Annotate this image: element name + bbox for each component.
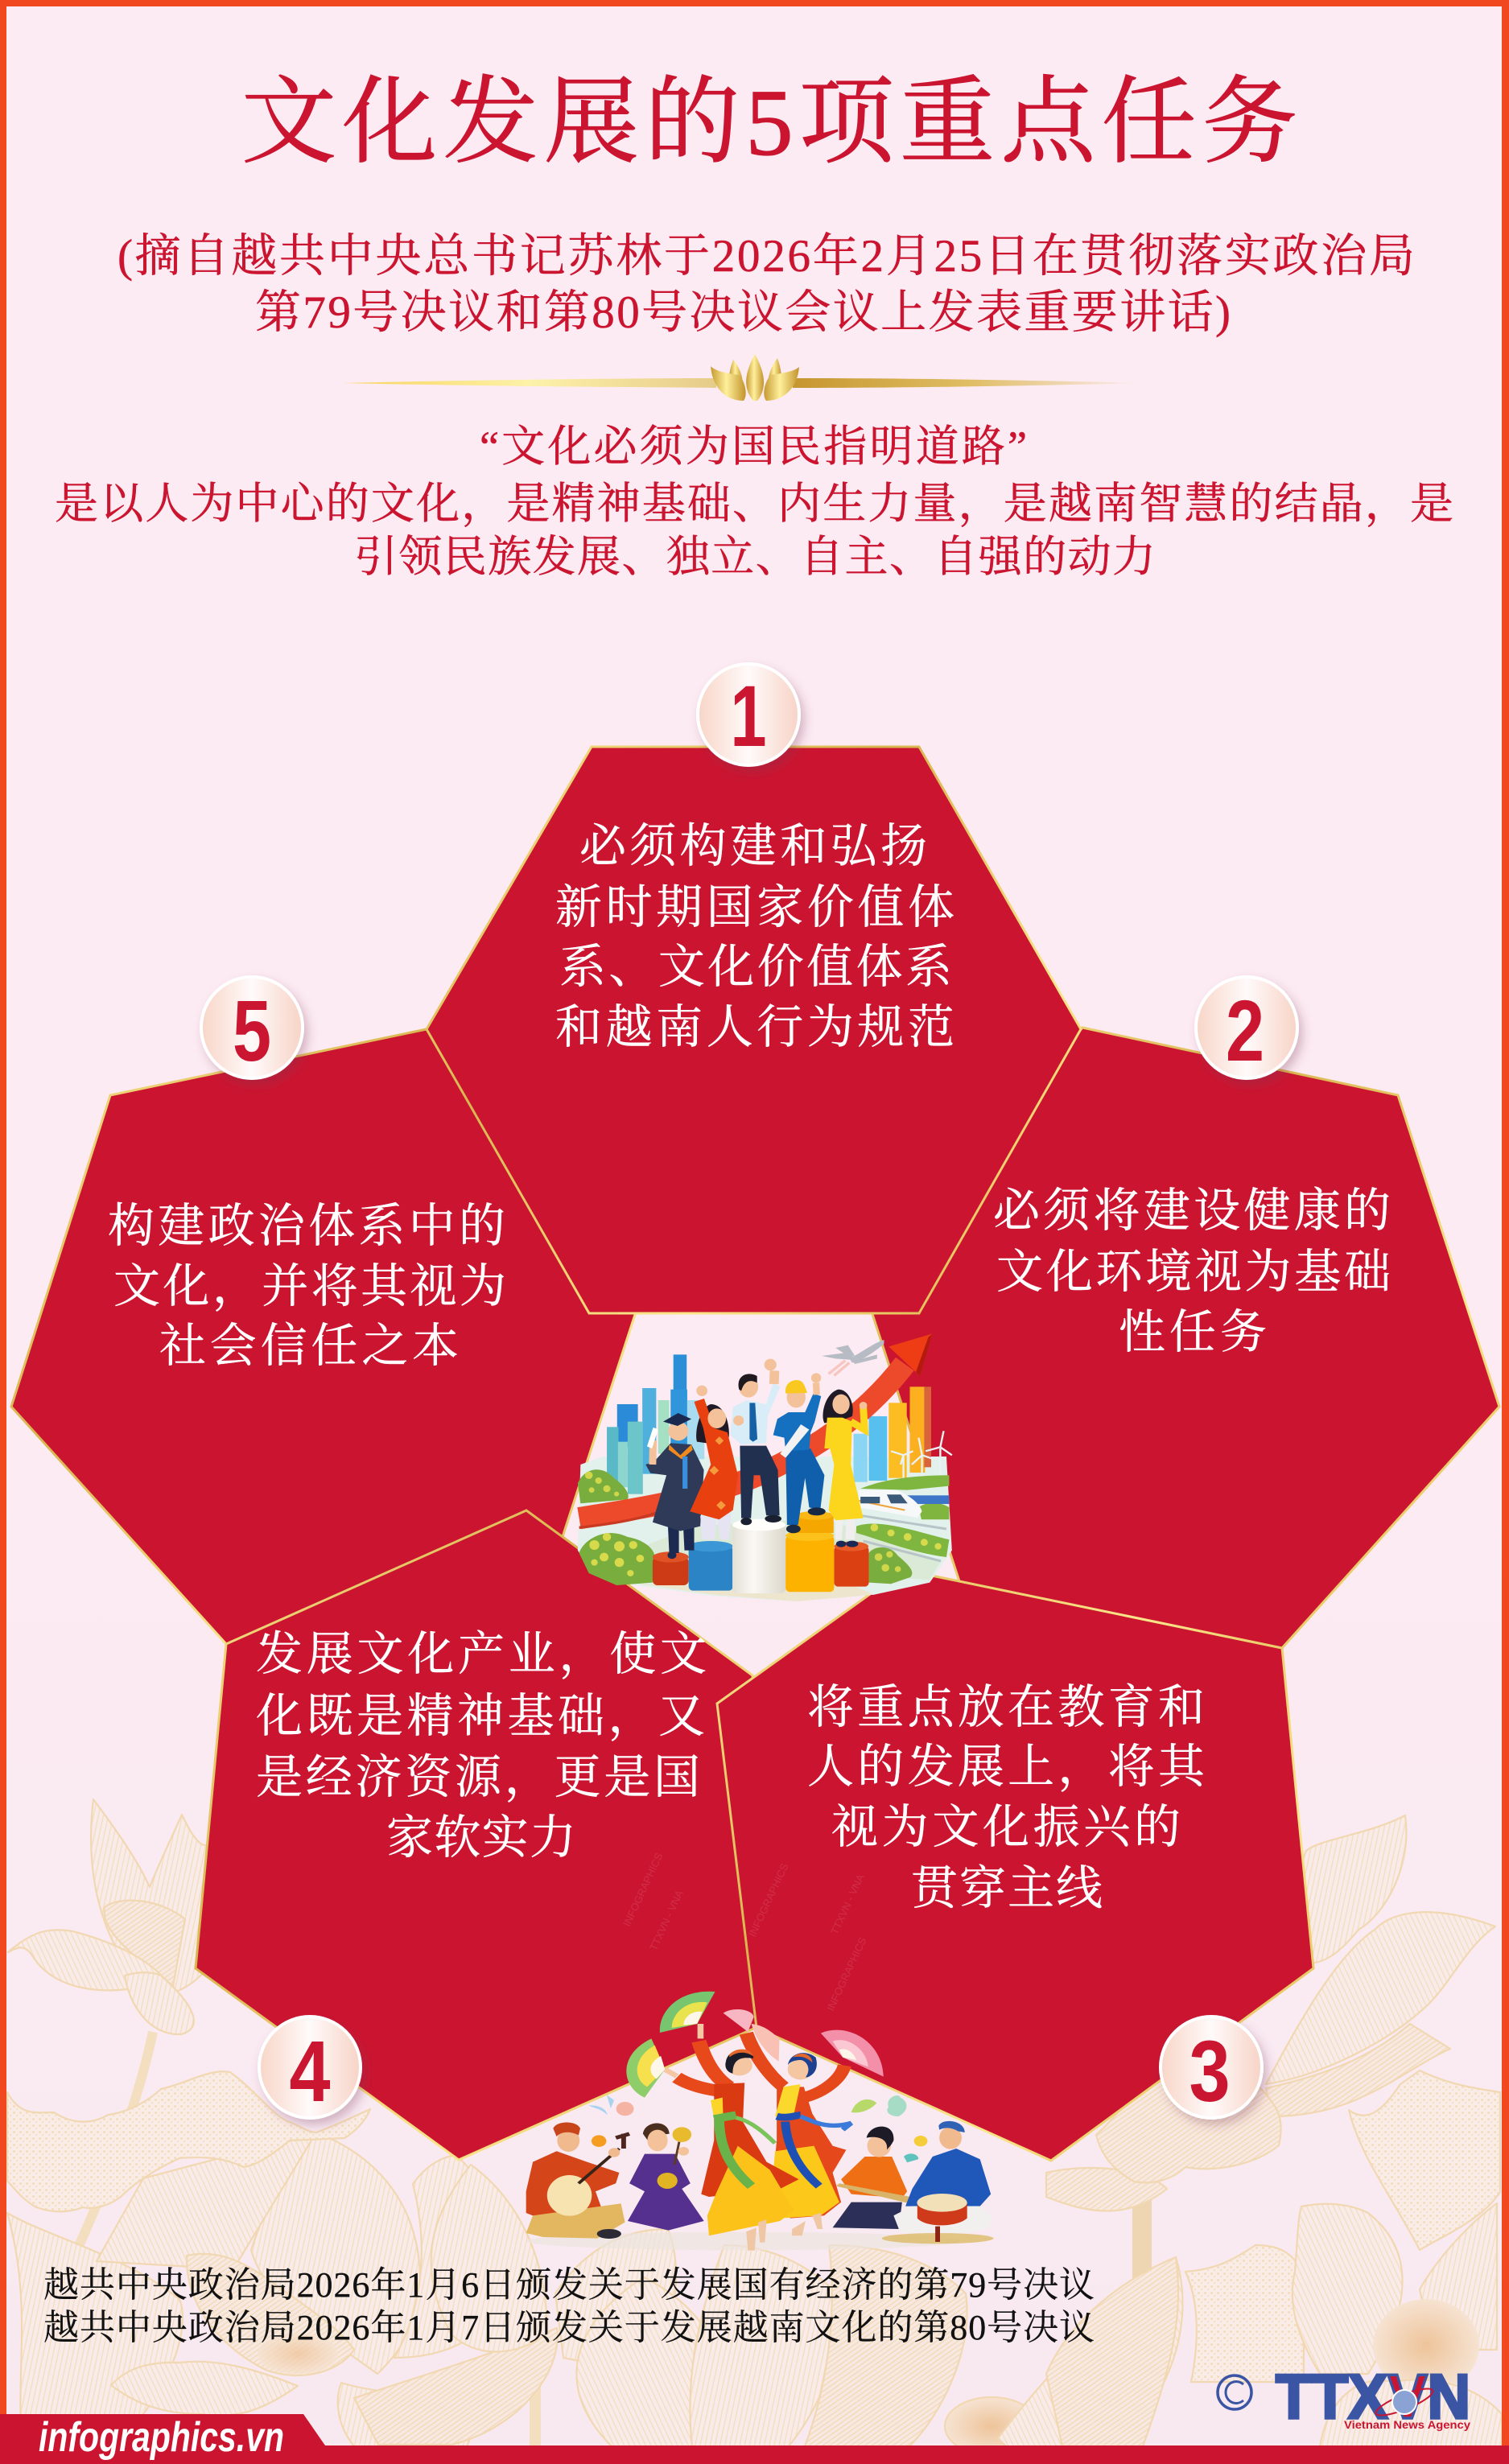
panel 3 text: 人的发展上，将其 <box>807 1741 1207 1793</box>
panel 5 text: 构建政治体系中的 <box>108 1200 505 1252</box>
number badge 4: 4 <box>289 2023 331 2120</box>
musician: woman in purple <box>628 2124 704 2231</box>
number badge 1 <box>698 664 799 765</box>
airplane <box>822 1340 884 1375</box>
dancer left <box>665 2024 798 2251</box>
globe with orbit <box>1373 2384 1436 2421</box>
skyline buildings <box>607 1354 887 1494</box>
faint watermarks: INFOGRAPHICS <box>621 1851 666 1928</box>
panel 4 text: 化既是精神基础，又 <box>256 1690 705 1742</box>
podium cylinders <box>653 1511 869 1593</box>
number badge 4 <box>259 2017 361 2120</box>
panel 3 text: 视为文化振兴的 <box>831 1801 1181 1853</box>
faint watermarks <box>621 1851 869 2013</box>
number badge 2 <box>1196 977 1297 1079</box>
quote and statement <box>55 422 1453 581</box>
agency caption: Vietnam News Agency <box>1344 2418 1470 2431</box>
agency wordmark: TTXVN <box>1276 2361 1470 2432</box>
dancer right <box>746 2033 851 2235</box>
musician: drummer in blue <box>882 2121 994 2244</box>
panel 2 text: 性任务 <box>1119 1306 1267 1358</box>
site name: infographics.vn <box>39 2414 284 2461</box>
fan: top pink <box>724 2009 780 2062</box>
panel 5 text: 社会信任之本 <box>159 1320 459 1372</box>
figure: graduate <box>645 1413 704 1559</box>
resolution references <box>43 2265 1095 2347</box>
fan: top green-yellow <box>660 1992 715 2033</box>
quote and statement: “文化必须为国民指明道路” <box>480 422 1027 471</box>
panel 3 text: 贯穿主线 <box>911 1862 1103 1914</box>
panel 2 text: 必须将建设健康的 <box>993 1185 1391 1237</box>
number badge 5 <box>201 977 303 1079</box>
subtitle: (摘自越共中央总书记苏林于2026年2月25日在贯彻落实政治局 <box>118 231 1415 282</box>
figure: worker in yellow hard hat <box>773 1373 826 1533</box>
divider with golden lotus <box>343 354 1143 401</box>
number badge 3 <box>1161 2017 1262 2120</box>
panel 5: political system culture <box>11 1029 644 1644</box>
panel 4 text <box>256 1628 707 1864</box>
red rising arrow <box>579 1333 933 1527</box>
quote and statement: 是以人为中心的文化，是精神基础、内生力量，是越南智慧的结晶，是 <box>55 480 1453 528</box>
high-speed train <box>859 1490 949 1561</box>
number badge 2: 2 <box>1226 982 1264 1079</box>
panel 5 text: 文化，并将其视为 <box>113 1260 506 1312</box>
faint watermarks: INFOGRAPHICS <box>746 1861 791 1939</box>
faint watermarks: TTXVN - VNA <box>828 1872 867 1936</box>
number badge 5: 5 <box>233 982 271 1079</box>
bottom red bar with site tab <box>0 2414 1509 2464</box>
panel 1 text: 系、文化价值体系 <box>559 941 952 993</box>
ground wash <box>578 1457 952 1601</box>
faint watermarks: INFOGRAPHICS <box>824 1935 869 2013</box>
figure: woman in red ao dai <box>690 1386 738 1539</box>
panel 2 text <box>993 1185 1391 1358</box>
decorative flowers <box>589 2095 927 2162</box>
panel 3 text: 将重点放在教育和 <box>807 1681 1205 1733</box>
panel 3 text <box>807 1681 1207 1914</box>
wind turbines <box>891 1431 952 1486</box>
panel 3: education and human development <box>717 1570 1313 2161</box>
green hills and upper bushes <box>578 1469 949 1580</box>
panel 4: cultural industry <box>196 1510 785 2160</box>
panel 1 text: 新时期国家价值体 <box>555 881 954 933</box>
panel 5 text <box>108 1200 506 1372</box>
subtitle: 第79号决议和第80号决议会议上发表重要讲话) <box>255 287 1231 338</box>
panel 4 text: 是经济资源，更是国 <box>256 1751 700 1803</box>
panel 1 text: 必须构建和弘扬 <box>579 820 927 872</box>
faint watermarks: TTXVN - VNA <box>647 1888 686 1952</box>
quote and statement: 引领民族发展、独立、自主、自强的动力 <box>354 533 1156 581</box>
copyright mark <box>1218 2375 1251 2409</box>
title: 文化发展的5项重点任务 <box>241 70 1297 175</box>
fan: left green-yellow <box>626 2038 665 2098</box>
musician: woman with zither <box>833 2127 917 2229</box>
panel 2: healthy cultural environment <box>861 1028 1499 1648</box>
panel 2 text: 文化环境视为基础 <box>996 1246 1391 1298</box>
panel 1: national values <box>427 747 1081 1313</box>
resolution references: 越共中央政治局2026年1月6日颁发关于发展国有经济的第79号决议 <box>43 2265 1095 2305</box>
TTXVN logo <box>1218 2361 1470 2432</box>
soft ground shadow <box>526 2232 959 2250</box>
resolution references: 越共中央政治局2026年1月7日颁发关于发展越南文化的第80号决议 <box>43 2308 1095 2347</box>
number badge 3: 3 <box>1189 2023 1231 2120</box>
front green bushes <box>579 1533 912 1585</box>
panel 1 text <box>555 820 954 1053</box>
panel 1 text: 和越南人行为规范 <box>555 1001 954 1053</box>
lotus line-art background <box>7 1799 1502 2455</box>
number badge 1: 1 <box>730 669 767 765</box>
yellow bar columns <box>888 1387 931 1478</box>
subtitle <box>118 231 1415 338</box>
fan: right pink <box>821 2030 884 2077</box>
illustration: folk dancers and musicians <box>526 1992 994 2251</box>
figure: woman in yellow ao dai <box>823 1390 867 1547</box>
illustration: workers on rising bars with city skyline <box>578 1333 952 1601</box>
figure: man in white shirt and tie <box>730 1359 781 1525</box>
musician left: lute player <box>526 2122 629 2239</box>
panel 4 text: 发展文化产业，使文 <box>256 1628 707 1680</box>
panel 4 text: 家软实力 <box>386 1811 576 1864</box>
